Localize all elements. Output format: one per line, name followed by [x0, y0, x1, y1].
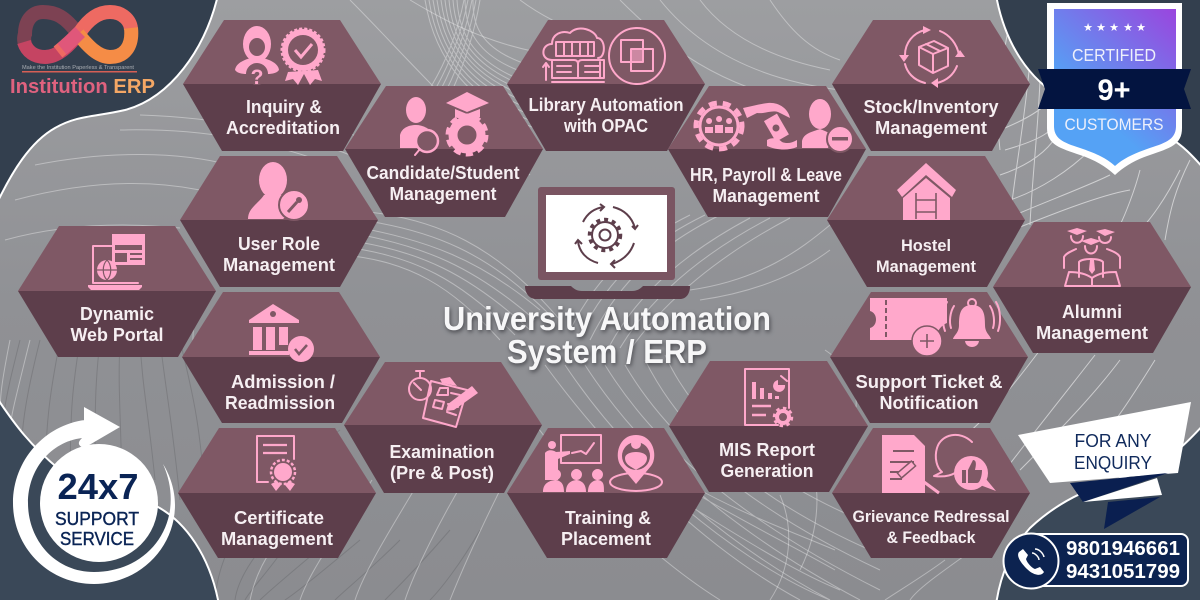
rating stars: ★: [1083, 22, 1093, 34]
icon: digital library and overlap: [543, 28, 665, 84]
rating stars: ★: [1109, 22, 1119, 34]
label: Certificate: [234, 508, 324, 528]
certified label: CERTIFIED: [1072, 45, 1156, 65]
panel: Library Automation with OPAC: [507, 20, 705, 151]
icon: exam clipboard, stopwatch and pencil: [409, 371, 478, 427]
label: Management: [1036, 323, 1148, 343]
label: Accreditation: [226, 118, 340, 138]
contact: phone numbers: [1004, 534, 1188, 588]
icon: inquiry person and rosette: [235, 26, 324, 89]
icon: inventory box cycle: [899, 26, 965, 88]
icon: trainer and location pin: [543, 435, 662, 492]
icon: web portal laptop: [88, 234, 145, 290]
title: System / ERP: [507, 333, 707, 370]
callout text: FOR ANY: [1074, 431, 1152, 451]
panel: Support Ticket & Notification: [830, 292, 1028, 423]
label: Inquiry &: [246, 97, 322, 117]
label: Support Ticket &: [856, 372, 1002, 392]
label: Dynamic: [80, 304, 154, 324]
icon: certificate: [257, 436, 295, 491]
label: MIS Report: [719, 440, 815, 460]
panel: Admission / Readmission: [182, 292, 380, 423]
label: Generation: [720, 461, 814, 481]
icon: inquiry person and rosette: ?: [251, 66, 263, 89]
arrow: circular: [13, 407, 175, 584]
panel: Candidate/Student Management: [345, 86, 543, 217]
label: Candidate/Student: [366, 163, 520, 183]
logo: Institution ERP: [10, 12, 155, 98]
ribbon: [1038, 69, 1191, 109]
corner: bottom-right dark shape: [996, 423, 1200, 600]
icon: ticket and bell: [870, 298, 1000, 356]
label: User Role: [238, 234, 320, 254]
customer count: 9+: [1098, 74, 1130, 107]
corner: bottom-left dark shape: [0, 398, 219, 600]
icon: candidate and graduation cap: [400, 92, 489, 155]
label: Web Portal: [70, 325, 164, 345]
label: Admission /: [231, 372, 335, 392]
circle with text: [40, 444, 158, 562]
panel: HR, Payroll & Leave Management: [668, 86, 866, 217]
panel: Examination (Pre & Post): [344, 362, 542, 493]
circle with text: 24x7: [58, 466, 138, 507]
label: Management: [876, 258, 976, 276]
label: Management: [223, 255, 335, 275]
circle with text: SUPPORT: [55, 509, 139, 529]
badge: 24x7 support service: [13, 407, 175, 584]
label: Readmission: [225, 393, 335, 413]
title: University Automation: [443, 300, 771, 337]
panel: Training & Placement: [507, 428, 705, 558]
label: Examination: [390, 442, 494, 462]
panel: Certificate Management: [178, 428, 376, 558]
panel: User Role Management: [180, 156, 378, 287]
icon: infinity loop: [24, 12, 131, 57]
icon: MIS report with chart and gear: [745, 369, 792, 426]
corner: top-right dark shape: [996, 0, 1200, 170]
callout text: ENQUIRY: [1074, 453, 1152, 473]
label: Alumni: [1062, 302, 1122, 322]
label: Training &: [565, 508, 651, 528]
icon: gear with cycle arrows: [575, 204, 638, 268]
icon: hostel house with bunk bed: [897, 163, 956, 220]
rating stars: ★: [1123, 22, 1133, 34]
phone number text: 9801946661: [1066, 538, 1180, 560]
icon: phone: [1018, 549, 1044, 575]
panel: Hostel Management: [827, 156, 1025, 287]
panel: Dynamic Web Portal: [18, 226, 216, 357]
panel: Grievance Redressal & Feedback: [832, 428, 1030, 558]
tagline: Make the Institution Paperless & Transparent: [22, 65, 135, 71]
rating stars: ★: [1096, 22, 1106, 34]
panel: Alumni Management: [993, 222, 1191, 353]
corner: top-left dark shape: [0, 0, 218, 203]
panel: MIS Report Generation: [669, 361, 868, 492]
phone number text: 9431051799: [1066, 561, 1180, 583]
circle with text: SERVICE: [60, 529, 134, 549]
label: HR, Payroll & Leave: [690, 165, 842, 185]
panel: Inquiry & Accreditation: [183, 20, 381, 151]
title: [443, 300, 771, 370]
icon: alumni graduates with book: [1064, 228, 1120, 286]
icon: institution building with check: [249, 304, 314, 362]
center: laptop with gear: [525, 187, 690, 299]
rating stars: ★: [1136, 22, 1146, 34]
icon: user with wrench: [248, 162, 309, 220]
label: Management: [390, 184, 496, 204]
label: Placement: [561, 529, 651, 549]
brand name: Institution ERP: [10, 76, 155, 98]
label: Library Automation: [528, 95, 684, 115]
label: Management: [221, 529, 333, 549]
icon: grievance document, gavel and thumbs-up: [882, 435, 996, 493]
label: with OPAC: [563, 116, 648, 136]
label: Stock/Inventory: [864, 97, 998, 117]
badge: certified shield: [1038, 3, 1191, 175]
label: & Feedback: [886, 529, 976, 547]
label: Grievance Redressal: [852, 508, 1010, 526]
label: (Pre & Post): [390, 463, 494, 483]
label: Notification: [880, 393, 978, 413]
panel: Stock/Inventory Management: [832, 20, 1030, 151]
label: Management: [875, 118, 987, 138]
label: Hostel: [901, 237, 951, 255]
customers label: CUSTOMERS: [1064, 116, 1164, 134]
label: Management: [712, 186, 820, 206]
icon: HR gear, money and leave: [696, 99, 853, 152]
callout: for any enquiry: [1018, 402, 1191, 529]
